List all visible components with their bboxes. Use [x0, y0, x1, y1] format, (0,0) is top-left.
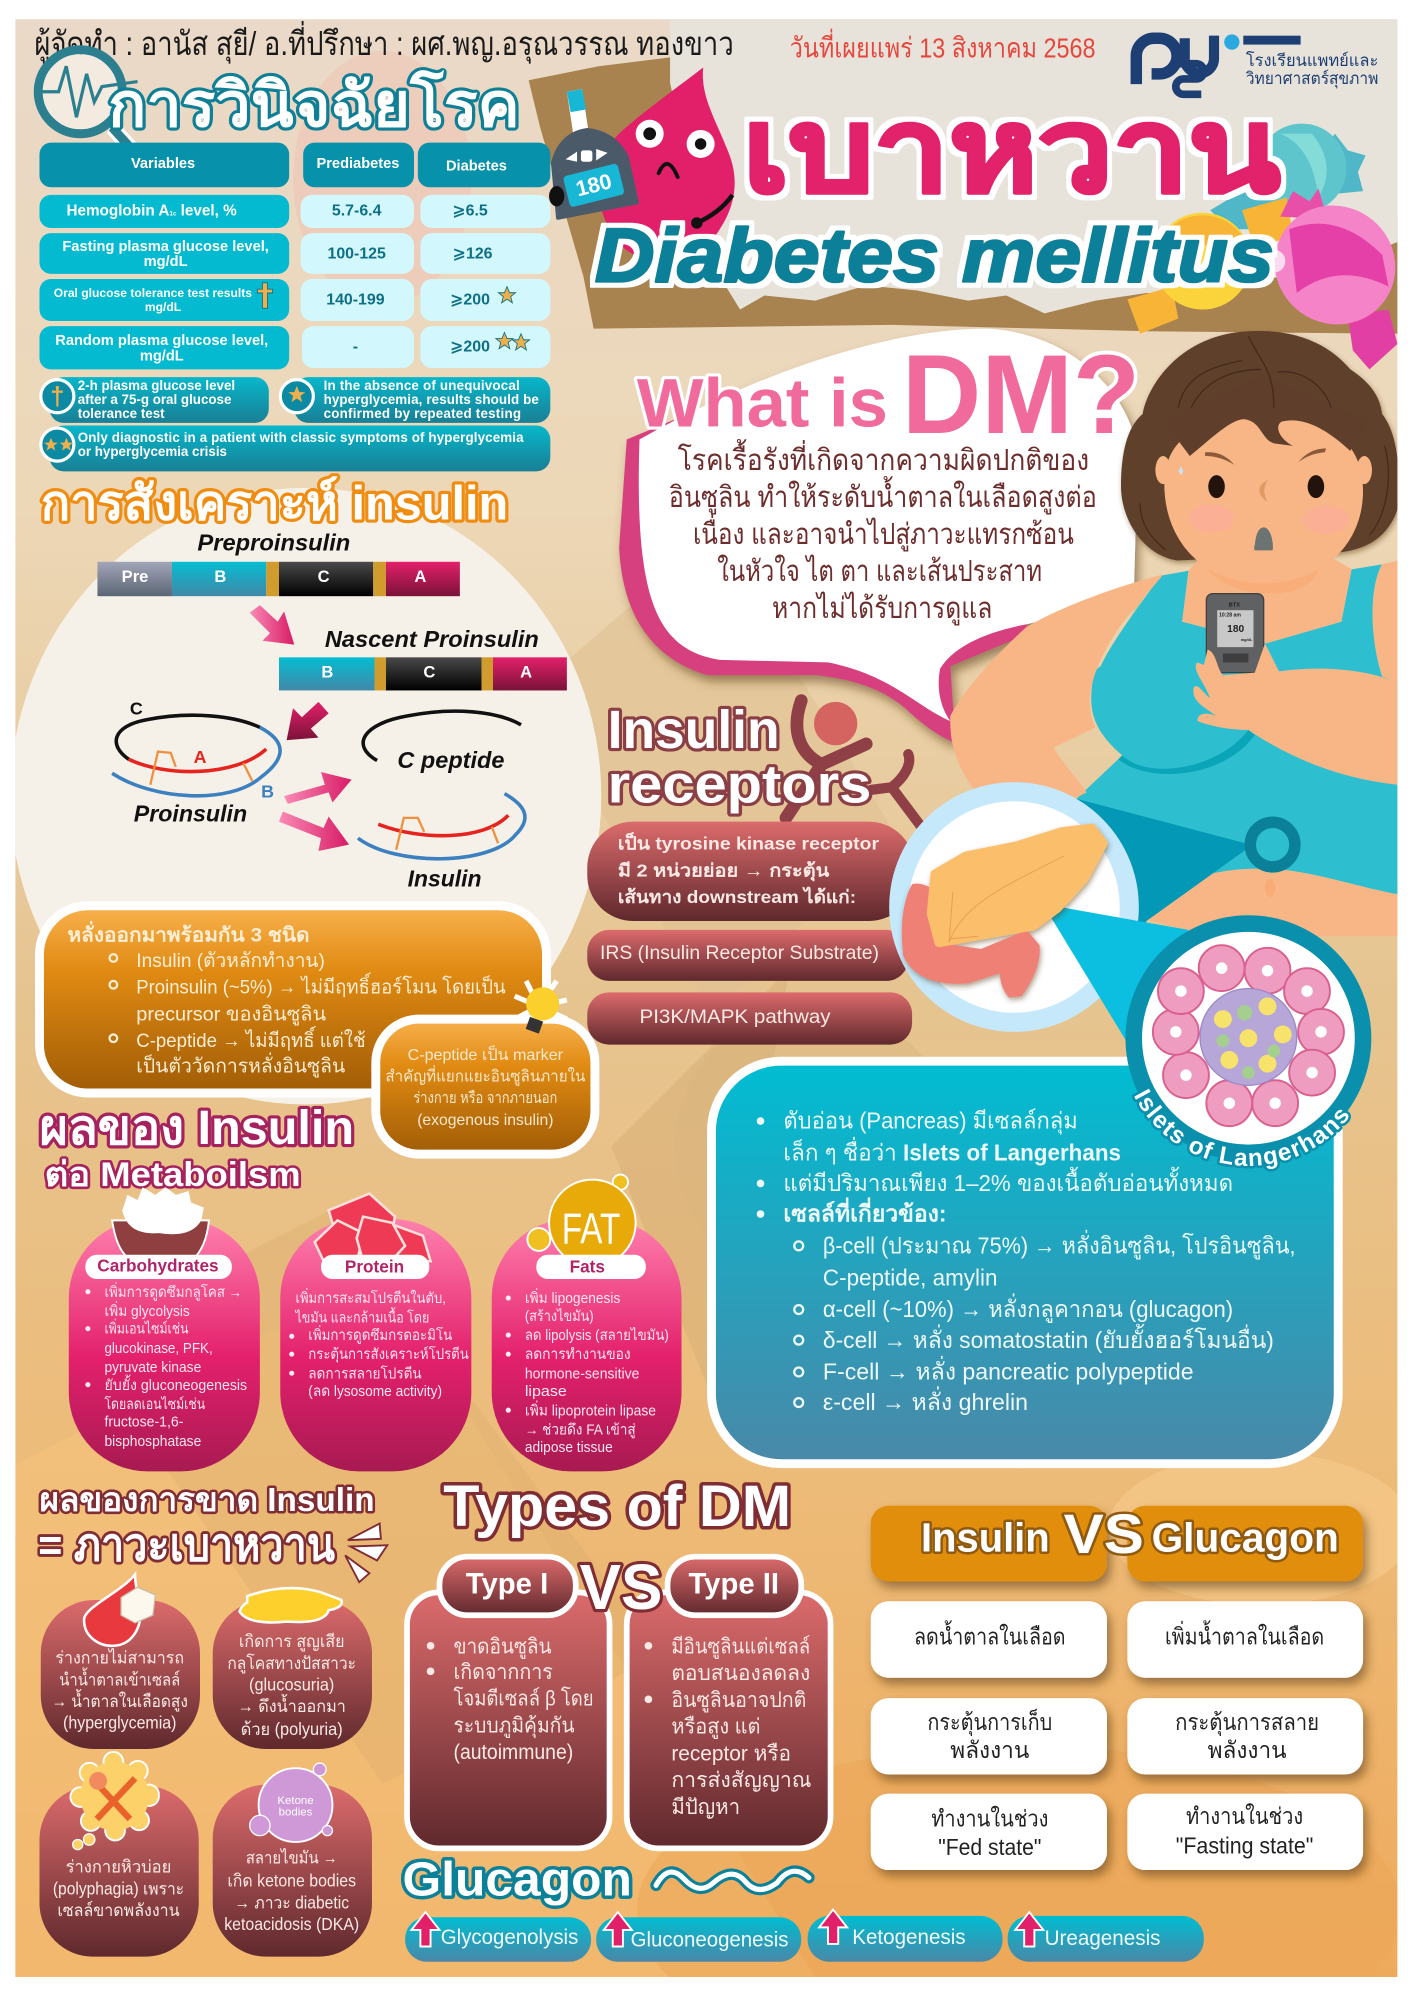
- woman: left arm: [950, 574, 1163, 798]
- icon: light bulb: [515, 981, 567, 1034]
- panel: polyphagia: ร่างกายหิวบ่อย: [66, 1857, 171, 1877]
- woman: hair: [1121, 331, 1399, 561]
- text: bisphosphatase: [104, 1434, 201, 1450]
- text: (ลด lysosome activity): [308, 1384, 442, 1400]
- woman: glucose meter in hand: mg/dL: [1241, 638, 1253, 642]
- comparison text: [914, 1621, 1324, 1860]
- icon: glucose meter: 180: [573, 168, 614, 201]
- candies: [1127, 124, 1414, 369]
- header labels: VS: [1064, 1502, 1144, 1565]
- comparison text: ทำงานในช่วง: [1186, 1803, 1303, 1829]
- heading: What is: What is: [637, 365, 888, 442]
- woman: neck and chest: [1182, 550, 1352, 643]
- logo: PSU: โรงเรียนแพทย์และ: [1246, 51, 1378, 70]
- table header labels: Diabetes: [446, 159, 507, 175]
- preproinsulin label: Preproinsulin: [197, 529, 350, 555]
- panel: ketoacidosis: เกิด ketone bodies: [227, 1871, 356, 1891]
- pathway: IRS: [587, 930, 908, 981]
- footnote marks: [257, 283, 530, 350]
- bullets: [85, 1289, 90, 1387]
- pancreas cells text: ตับอ่อน (Pancreas) มีเซลล์กลุ่ม: [783, 1108, 1078, 1135]
- woman: right arm: [1373, 561, 1397, 683]
- text: เกิดจากการ: [453, 1661, 553, 1684]
- footnote: double star: [41, 425, 550, 471]
- row labels: mg/dL: [140, 349, 184, 365]
- pancreas cells text: แต่มีปริมาณเพียง 1–2% ของเนื้อตับอ่อนทั้งหมด: [783, 1167, 1233, 1196]
- panel: ketoacidosis: ketoacidosis (DKA): [224, 1914, 359, 1934]
- bullets: [506, 1296, 511, 1413]
- candy: pink: [1273, 188, 1398, 370]
- pancreas circle: [899, 792, 1129, 1022]
- icon: glucagon wave: [656, 1871, 809, 1889]
- row values: ⩾200: [450, 291, 490, 308]
- candy: yellow: [1127, 197, 1293, 334]
- definition text: เนื่อง และอาจนำไปสู่ภาวะแทรกซ้อน: [693, 514, 1074, 552]
- comparison text: พลังงาน: [950, 1737, 1030, 1763]
- header labels: Insulin: [921, 1515, 1050, 1561]
- heading: glucagon: Glucagon: [403, 1853, 632, 1907]
- text: [525, 1288, 669, 1456]
- what is DM text: [637, 332, 1140, 626]
- pointer: navel to pancreas: [1076, 799, 1246, 955]
- torn paper banner: [529, 19, 1397, 334]
- definition text: หากไม่ได้รับการดูแล: [772, 591, 992, 626]
- footnote: double star: Only diagnostic in a patient with classic symptoms of hyperglycemia: [78, 430, 524, 445]
- candy: teal: [1210, 124, 1366, 229]
- glucagon pathways: Ureagenesis: [1045, 1927, 1160, 1950]
- proinsulin structure: [112, 699, 280, 801]
- panel: hyperglycemia: [41, 1575, 200, 1749]
- column headers: [871, 1506, 1363, 1582]
- arrow: to c peptide: [284, 772, 352, 804]
- footnote: dagger: 2-h plasma glucose level: [78, 378, 235, 393]
- pancreas callout: [889, 782, 1372, 1172]
- panel: glucosuria: [213, 1588, 372, 1749]
- receptor description: เส้นทาง downstream ได้แก่:: [618, 886, 856, 907]
- arrow: to proinsulin: [287, 702, 329, 740]
- preproinsulin bar: C: [318, 567, 330, 586]
- navel mark: [1265, 879, 1275, 897]
- table header: [39, 143, 550, 187]
- heading: insulin effect on metabolism: ต่อ Metaboilsm: [45, 1156, 301, 1194]
- preproinsulin bar: A: [414, 567, 426, 586]
- panel: ketoacidosis: → ภาวะ diabetic: [234, 1892, 349, 1912]
- woman: ears: [1155, 456, 1372, 484]
- icon: blood drop mascot: [599, 68, 735, 262]
- table header labels: Variables: [131, 156, 195, 172]
- woman: top shadow: [1118, 730, 1255, 774]
- glucagon pathways: Gluconeogenesis: [631, 1928, 789, 1951]
- heading: insulin effect on metabolism: [39, 1101, 354, 1194]
- footnote: double star: or hyperglycemia crisis: [78, 444, 227, 459]
- comparison cards: [871, 1601, 1363, 1870]
- text: [645, 1634, 811, 1819]
- pathway: PI3K/MAPK: PI3K/MAPK pathway: [639, 1007, 831, 1028]
- panel: hyperglycemia: นำน้ำตาลเข้าเซลล์: [59, 1667, 180, 1689]
- bullets: [289, 1334, 294, 1376]
- pancreas cells text: α-cell (~10%) → หลั่งกลูคากอน (glucagon): [823, 1293, 1233, 1323]
- text: มีอินซูลินแต่เซลล์: [671, 1634, 810, 1659]
- preproinsulin bar: B: [214, 567, 226, 586]
- nascent proinsulin bar: [279, 657, 567, 690]
- text: [427, 1635, 594, 1764]
- panel: polyphagia: [39, 1762, 199, 1957]
- proinsulin structure: B: [261, 781, 274, 801]
- panel: ketoacidosis: [213, 1763, 372, 1957]
- heading: insulin effect on metabolism: ผลของ Insulin: [39, 1101, 354, 1155]
- row values: ⩾6.5: [452, 202, 488, 219]
- logo: PSU: [1136, 34, 1378, 94]
- title: English: Diabetes mellitus: [595, 214, 1274, 299]
- preproinsulin bar: [97, 562, 460, 596]
- arrow: to insulin: [279, 811, 349, 851]
- panel: carbohydrates: Carbohydrates: [97, 1255, 219, 1275]
- pancreas cells text: β-cell (ประมาณ 75%) → หลั่งอินซูลิน, โปรอินซูลิน,: [823, 1230, 1296, 1260]
- bullet list: Insulin (ตัวหลักทำงาน): [136, 950, 325, 972]
- text: เพิ่ม lipoprotein lipase: [525, 1400, 656, 1419]
- footnote: single star: hyperglycemia, results should be: [324, 392, 539, 407]
- text: ลดการสลายโปรตีน: [308, 1364, 422, 1382]
- islet cells: [1153, 945, 1344, 1126]
- pancreas cells text: F-cell → หลั่ง pancreatic polypeptide: [823, 1356, 1194, 1385]
- text: เพิ่มการสะสมโปรตีนในตับ,: [296, 1288, 446, 1307]
- footnotes: [41, 377, 550, 471]
- glucagon pathways: [405, 1910, 1204, 1962]
- comparison text: เพิ่มน้ำตาลในเลือด: [1165, 1621, 1324, 1650]
- footnote: single star: [280, 377, 550, 423]
- nascent proinsulin bar: A: [520, 663, 532, 682]
- heading: Insulin receptors: Insulin: [608, 701, 780, 760]
- text: หรือสูง แต่: [671, 1716, 761, 1740]
- row labels: Fasting plasma glucose level,: [62, 239, 269, 255]
- heading: types of DM: Types of DM: [443, 1474, 791, 1539]
- row labels: Oral glucose tolerance test results: [54, 286, 252, 300]
- text: มีปัญหา: [671, 1796, 740, 1819]
- woman figure: [950, 331, 1399, 936]
- woman: glucose meter in hand: 180: [1227, 624, 1244, 635]
- panel: type I: [407, 1557, 610, 1848]
- heading: insulin deficiency: = ภาวะเบาหวาน: [38, 1519, 335, 1571]
- callout: c-peptide marker: C-peptide เป็น marker: [408, 1044, 564, 1064]
- table header labels: Prediabetes: [316, 156, 399, 172]
- definition text: อินซูลิน ทำให้ระดับน้ำตาลในเลือดสูงต่อ: [669, 476, 1097, 515]
- proinsulin structure: A: [194, 747, 207, 767]
- comparison text: กระตุ้นการสลาย: [1175, 1709, 1319, 1736]
- icon: urine puddle: [239, 1588, 342, 1622]
- panel: carbohydrates: [69, 1187, 260, 1471]
- heading: Insulin receptors: receptors: [608, 756, 871, 815]
- footnote: single star: In the absence of unequivocal: [324, 378, 520, 393]
- nascent proinsulin bar: C: [423, 663, 435, 682]
- text: (autoimmune): [453, 1741, 573, 1764]
- icon: meat: [315, 1194, 431, 1264]
- icon: glucose meter: [549, 89, 637, 218]
- text: [295, 1288, 469, 1400]
- text: ขาดอินซูลิน: [453, 1635, 552, 1659]
- text: อินซูลินอาจปกติ: [671, 1689, 806, 1713]
- panel: hyperglycemia: (hyperglycemia): [63, 1713, 176, 1733]
- icon: rice bowl: [112, 1187, 209, 1261]
- panel: glucosuria: กลูโคสทางปัสสาวะ: [227, 1653, 356, 1674]
- definition text: [669, 439, 1097, 626]
- icon: magnifier with pulse: [38, 50, 138, 155]
- text: โดยลดเอนไซม์เช่น: [104, 1395, 205, 1413]
- up arrows: [411, 1910, 1043, 1946]
- text: เพิ่ม glycolysis: [104, 1301, 190, 1320]
- panel heading: หลั่งออกมาพร้อมกัน 3 ชนิด: [68, 920, 310, 946]
- text: lipase: [525, 1384, 567, 1400]
- insulin synthesis diagram: [97, 529, 567, 892]
- receptor description: มี 2 หน่วยย่อย → กระตุ้น: [618, 860, 830, 881]
- icon: fat droplet: FAT: [562, 1205, 620, 1253]
- heading: insulin synthesis: การสังเคราะห์ insulin: [41, 477, 508, 531]
- heading: DM?: DM?: [902, 332, 1140, 457]
- woman: top: [1076, 564, 1397, 920]
- bullet list: เป็นตัววัดการหลั่งอินซูลิน: [136, 1053, 346, 1079]
- text: → ช่วยดึง FA เข้าสู่: [525, 1421, 636, 1438]
- text: adipose tissue: [525, 1440, 613, 1456]
- icon: ketone bodies: bodies: [279, 1806, 313, 1818]
- icon: pancreas: [902, 828, 1103, 997]
- panel: type II: [627, 1557, 831, 1848]
- icon: blood drop with sugar cube: [84, 1575, 155, 1646]
- callout: c-peptide marker: สำคัญที่แยกแยะอินซูลินภายใน: [385, 1065, 585, 1087]
- text: โจมตีเซลล์ β โดย: [453, 1687, 594, 1711]
- row values: -: [353, 339, 358, 356]
- table header labels: [131, 157, 506, 170]
- comparison text: "Fed state": [938, 1834, 1041, 1860]
- nascent proinsulin label: Nascent Proinsulin: [325, 626, 539, 652]
- pancreas cells text: C-peptide, amylin: [823, 1264, 997, 1290]
- panel: pancreas cells: [711, 1061, 1338, 1464]
- definition text: โรคเรื้อรังที่เกิดจากความผิดปกติของ: [678, 439, 1089, 477]
- VS label: VS: [580, 1552, 662, 1623]
- woman: face: [1164, 417, 1363, 583]
- tab: [439, 1557, 576, 1615]
- pancreas cells text: [757, 1108, 1296, 1415]
- heading: insulin deficiency: [38, 1482, 375, 1571]
- label: [321, 1255, 429, 1279]
- islets label: Islets of Langerhans: [1132, 1088, 1351, 1172]
- label: [536, 1255, 646, 1279]
- proinsulin label: Proinsulin: [134, 801, 247, 827]
- text: hormone-sensitive: [525, 1366, 639, 1382]
- pancreas cells text: เล็ก ๆ ชื่อว่า Islets of Langerhans: [783, 1137, 1121, 1166]
- pathway: PI3K/MAPK: [587, 992, 912, 1045]
- pointer: pancreas to islet: [1051, 907, 1189, 1047]
- footnote: dagger: after a 75-g oral glucose: [78, 392, 231, 407]
- panel: co-secretion: [39, 906, 546, 1093]
- text: เพิ่ม lipogenesis: [525, 1288, 620, 1307]
- text: ไขมัน และกล้ามเนื้อ โดย: [295, 1306, 429, 1326]
- c peptide label: C peptide: [397, 747, 505, 773]
- text: เพิ่มการดูดซึมกลูโคส →: [104, 1282, 242, 1301]
- row labels: Random plasma glucose level,: [55, 333, 268, 349]
- bullet list: C-peptide → ไม่มีฤทธิ์ แต่ใช้: [136, 1025, 366, 1052]
- bullet list: precursor ของอินซูลิน: [136, 1003, 327, 1026]
- arrow: to nascent: [250, 605, 294, 645]
- text: เพิ่มเอนไซม์เช่น: [104, 1319, 189, 1338]
- text: เพิ่มการดูดซึมกรดอะมิโน: [308, 1325, 452, 1344]
- logo: PSU: วิทยาศาสตร์สุขภาพ: [1245, 69, 1378, 89]
- row labels: Hemoglobin A1c level, %: [66, 202, 237, 219]
- row labels: mg/dL: [145, 300, 182, 314]
- text: [104, 1282, 247, 1450]
- preproinsulin bar: Pre: [122, 567, 148, 586]
- text: (สร้างไขมัน): [525, 1307, 594, 1325]
- row values: ⩾126: [453, 246, 493, 263]
- glucagon pathways: Glycogenolysis: [441, 1926, 578, 1949]
- callout: c-peptide marker: ร่างกาย หรือ จากภายนอก: [413, 1089, 557, 1107]
- woman: lower belly: [1148, 868, 1398, 936]
- icon: ketone bodies: [250, 1763, 332, 1842]
- woman: glucose meter in hand: [1206, 594, 1264, 673]
- icon: hungry thought: [73, 1762, 149, 1850]
- footnote: single star: confirmed by repeated testing: [324, 406, 521, 421]
- text: ระบบภูมิคุ้มกัน: [453, 1714, 575, 1738]
- title: Thai: เบาหวาน: [743, 85, 1280, 216]
- glucagon pathways: Ketogenesis: [852, 1926, 966, 1949]
- panel: glucosuria: ด้วย (polyuria): [241, 1719, 343, 1739]
- row labels: [54, 202, 269, 365]
- header labels: [921, 1502, 1339, 1565]
- proinsulin structure: C: [130, 699, 143, 719]
- panel: glucosuria: → ดึงน้ำออกมา: [238, 1694, 346, 1716]
- woman: glucose meter in hand: 10:28 am: [1219, 613, 1241, 619]
- islets circle: [1134, 924, 1363, 1153]
- heading: diagnosis: การวินิจฉัยโรค: [108, 69, 520, 139]
- icon: burst: [345, 1524, 387, 1582]
- woman: glucose meter in hand: BTX: [1229, 602, 1240, 608]
- pancreas cells text: ε-cell → หลั่ง ghrelin: [823, 1386, 1028, 1415]
- text: ลด lipolysis (สลายไขมัน): [525, 1326, 669, 1344]
- woman: facial features: [1178, 448, 1349, 550]
- comparison text: กระตุ้นการเก็บ: [927, 1707, 1052, 1736]
- panel: hyperglycemia: ร่างกายไม่สามารถ: [55, 1648, 184, 1668]
- icon: navel ring: [1250, 822, 1295, 867]
- text: กระตุ้นการสังเคราะห์โปรตีน: [308, 1345, 469, 1363]
- footnote: dagger: [41, 377, 269, 423]
- row values: ⩾200: [450, 339, 490, 356]
- text: การส่งสัญญาณ: [671, 1769, 811, 1792]
- row values: 5.7-6.4: [332, 202, 382, 219]
- text: pyruvate kinase: [104, 1360, 201, 1376]
- icon: receptor: [786, 701, 922, 828]
- woman: double chin: [1206, 567, 1320, 594]
- pancreas cells text: δ-cell → หลั่ง somatostatin (ยับยั้งฮอร์โมนอื่น): [823, 1324, 1274, 1353]
- heading: insulin deficiency: ผลของการขาด Insulin: [39, 1482, 375, 1519]
- text: ลดการทำงานของ: [525, 1347, 631, 1363]
- panel: fats: Fats: [570, 1257, 605, 1277]
- footnote: dagger: †: [50, 383, 64, 411]
- comparison text: "Fasting state": [1176, 1832, 1313, 1858]
- pathway: IRS: IRS (Insulin Receptor Substrate): [600, 943, 879, 964]
- label: [85, 1255, 232, 1279]
- insulin label: Insulin: [408, 866, 482, 892]
- tab: Type II: [688, 1568, 779, 1601]
- icon: ketone bodies: Ketone: [277, 1795, 314, 1807]
- text: glucokinase, PFK,: [104, 1341, 213, 1357]
- bullet list: [110, 950, 506, 1079]
- woman: hair strands: [1140, 336, 1388, 550]
- panel: glucosuria: (glucosuria): [249, 1674, 334, 1694]
- c peptide curve: [363, 711, 521, 761]
- heading: Insulin receptors: [608, 701, 871, 815]
- table row cells: [39, 195, 550, 369]
- comparison text: พลังงาน: [1208, 1737, 1287, 1763]
- panel: ketoacidosis: สลายไขมัน →: [246, 1848, 338, 1868]
- header labels: Glucagon: [1152, 1515, 1339, 1561]
- text: ตอบสนองลดลง: [671, 1662, 810, 1685]
- publication date: วันที่เผยแพร่ 13 สิงหาคม 2568: [790, 28, 1096, 63]
- panel: glucosuria: เกิดการ สูญเสีย: [239, 1631, 345, 1652]
- row values: [326, 202, 493, 356]
- panel: protein: [280, 1194, 471, 1471]
- tab: [668, 1557, 801, 1615]
- panel: protein: Protein: [345, 1257, 404, 1277]
- tab: Type I: [466, 1568, 548, 1601]
- text: receptor หรือ: [671, 1743, 791, 1766]
- woman: hand and forearm: [1193, 643, 1397, 785]
- diagnosis table: [39, 143, 550, 369]
- nascent proinsulin bar: B: [321, 663, 333, 682]
- text: fructose-1,6-: [104, 1415, 184, 1431]
- comparison text: ทำงานในช่วง: [931, 1806, 1048, 1832]
- insulin structure: [358, 794, 525, 859]
- credits line: ผู้จัดทำ : อานัส สุยี/ อ.ที่ปรึกษา : ผศ.พญ.อรุณวรรณ ทองขาว: [34, 21, 734, 64]
- receptor description: [587, 822, 915, 921]
- panel: polyphagia: (polyphagia) เพราะ: [53, 1878, 184, 1898]
- comparison text: ลดน้ำตาลในเลือด: [914, 1621, 1066, 1650]
- panel: fats: [492, 1175, 682, 1471]
- row values: 140-199: [326, 291, 385, 308]
- insulin vs glucagon table: [871, 1502, 1363, 1870]
- panel: polyphagia: เซลล์ขาดพลังงาน: [57, 1900, 180, 1920]
- row values: 100-125: [327, 246, 386, 263]
- speech bubble shape: [619, 329, 1138, 743]
- icon: fat droplet: [527, 1175, 636, 1266]
- text: ยับยั้ง gluconeogenesis: [104, 1374, 247, 1394]
- footnote: dagger: tolerance test: [78, 406, 165, 421]
- woman: fringe: [1179, 417, 1352, 456]
- bullet list: Proinsulin (~5%) → ไม่มีฤทธิ์ฮอร์โมน โดยเป็น: [136, 972, 506, 999]
- panel: hyperglycemia: → น้ำตาลในเลือดสูง: [52, 1689, 188, 1712]
- callout: c-peptide marker: [376, 1019, 595, 1154]
- receptor description: เป็น tyrosine kinase receptor: [618, 832, 879, 854]
- definition text: ในหัวใจ ไต ตา และเส้นประสาท: [717, 554, 1042, 588]
- row labels: mg/dL: [144, 254, 188, 270]
- insulin receptors section: [587, 701, 922, 1045]
- pancreas cells text: เซลล์ที่เกี่ยวข้อง:: [783, 1198, 946, 1227]
- callout: c-peptide marker: (exogenous insulin): [417, 1112, 553, 1129]
